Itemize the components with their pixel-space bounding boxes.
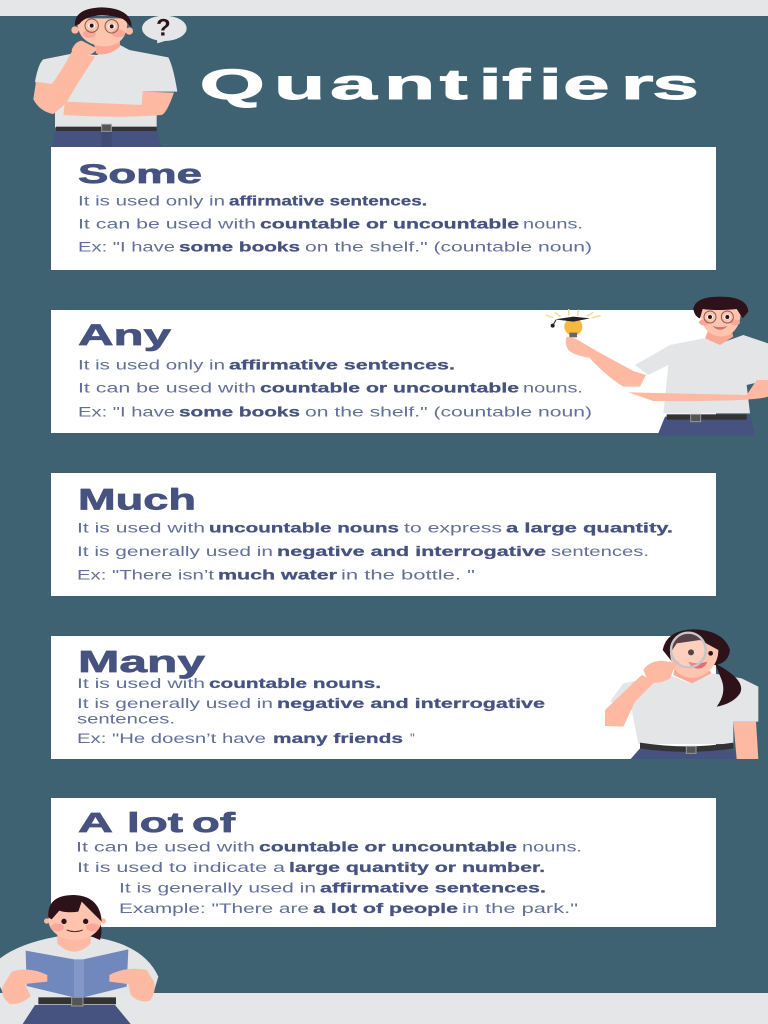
- icon: open book: [26, 949, 128, 997]
- rule: countable or uncountable: countable or uncountable: [259, 840, 518, 854]
- rule: uncountable nouns: a large quantity.: [506, 520, 673, 536]
- heading: some: Some: [78, 159, 202, 189]
- rule: countable or uncountable: nouns.: [522, 840, 582, 854]
- example: many friends: many friends: [273, 731, 403, 746]
- rule: countable or uncountable: It can be used with: [78, 216, 256, 232]
- example: some books: Ex: "I have: [78, 404, 175, 420]
- rule: affirmative sentences: [119, 880, 546, 896]
- rule: negative and interrogative: negative and interrogative: [277, 696, 546, 711]
- example: some books: some books: [179, 404, 300, 420]
- rule: countable or uncountable: nouns.: [523, 380, 583, 396]
- icon: question bubble: [142, 15, 187, 43]
- heading: a lot of: [78, 807, 236, 838]
- example: many friends: Ex: "He doesn’t have: [77, 731, 266, 746]
- rule: affirmative sentences: It is used only in: [78, 358, 225, 372]
- icon: magnifying glass: [671, 633, 706, 667]
- example: much water: Ex: "There isn’t: [77, 568, 214, 582]
- rule: countable or uncountable: It can be used with: [76, 840, 255, 854]
- example: some books: some books: [179, 240, 300, 254]
- rule: affirmative sentences: [78, 194, 427, 208]
- rule: countable or uncountable: nouns.: [523, 216, 583, 232]
- example: much water: in the bottle. ": [341, 568, 475, 582]
- rule: countable nouns: It is used with: [77, 676, 205, 691]
- rule: large quantity: It is used to indicate a: [77, 860, 286, 875]
- heading: any: Any: [78, 319, 171, 352]
- rule: uncountable nouns: It is used with: [77, 520, 205, 536]
- rule: negative and interrogative: [77, 696, 546, 726]
- example: many friends: ": [410, 731, 415, 746]
- heading: a lot of: lot: [127, 807, 183, 838]
- panel: much: [51, 473, 716, 596]
- example: some books: [78, 404, 592, 420]
- rule: negative and interrogative: sentences.: [77, 712, 175, 726]
- heading: a lot of: of: [192, 807, 236, 838]
- rule: affirmative sentences: [78, 358, 455, 372]
- rule: affirmative sentences: affirmative sentences.: [320, 880, 546, 896]
- title: Quantifiers: [200, 61, 699, 109]
- icon: question bubble: ?: [156, 15, 171, 42]
- rule: countable or uncountable: [78, 380, 583, 396]
- panel: some: [51, 147, 716, 270]
- example: much water: [77, 568, 475, 582]
- example: much water: much water: [218, 568, 338, 582]
- heading: a lot of: A: [78, 807, 113, 838]
- example: a lot of people: Example: "There are: [119, 901, 309, 916]
- illustration: thinking man with question bubble: [33, 7, 187, 147]
- rule: negative and interrogative: It is generally used in: [77, 696, 273, 711]
- rule: countable nouns: countable nouns.: [209, 676, 381, 691]
- heading: many: Many: [78, 644, 206, 679]
- panel: many: [51, 636, 716, 759]
- example: some books: on the shelf." (countable noun): [305, 404, 592, 420]
- rule: affirmative sentences: It is generally used in: [119, 880, 316, 896]
- rule: uncountable nouns: [77, 520, 673, 536]
- rule: countable or uncountable: [76, 840, 582, 854]
- illustration: woman with magnifying glass: [605, 629, 758, 759]
- icon: light bulb with graduation cap: [545, 309, 601, 337]
- rule: countable or uncountable: [78, 216, 583, 232]
- rule: countable or uncountable: It can be used with: [78, 380, 256, 396]
- rule: uncountable nouns: uncountable nouns: [209, 520, 399, 536]
- example: a lot of people: [119, 901, 578, 916]
- example: some books: Ex: "I have: [78, 240, 175, 254]
- heading: much: Much: [78, 484, 196, 516]
- rule: negative and interrogative: [77, 544, 649, 559]
- rule: affirmative sentences: affirmative sentences.: [229, 358, 455, 372]
- example: a lot of people: in the park.": [462, 901, 578, 916]
- example: many friends: [77, 731, 415, 746]
- rule: uncountable nouns: to express: [404, 520, 502, 536]
- rule: countable nouns: [77, 676, 381, 691]
- example: some books: [78, 240, 592, 254]
- example: a lot of people: a lot of people: [313, 901, 459, 916]
- example: some books: on the shelf." (countable noun): [305, 240, 592, 254]
- rule: large quantity: [77, 860, 545, 875]
- rule: negative and interrogative: negative and interrogative: [277, 544, 547, 559]
- illustration: man holding light bulb: [545, 297, 768, 436]
- illustration: woman reading book: [0, 895, 158, 1024]
- panel: any: [51, 310, 716, 433]
- rule: negative and interrogative: sentences.: [551, 544, 649, 559]
- rule: countable or uncountable: countable or uncountable: [260, 380, 520, 396]
- rule: large quantity: large quantity or number.: [289, 860, 545, 875]
- rule: countable or uncountable: countable or uncountable: [260, 216, 520, 232]
- panel: a lot of: [51, 798, 716, 927]
- rule: affirmative sentences: affirmative sentences.: [229, 194, 427, 208]
- rule: negative and interrogative: It is generally used in: [77, 544, 273, 559]
- rule: affirmative sentences: It is used only in: [78, 194, 225, 208]
